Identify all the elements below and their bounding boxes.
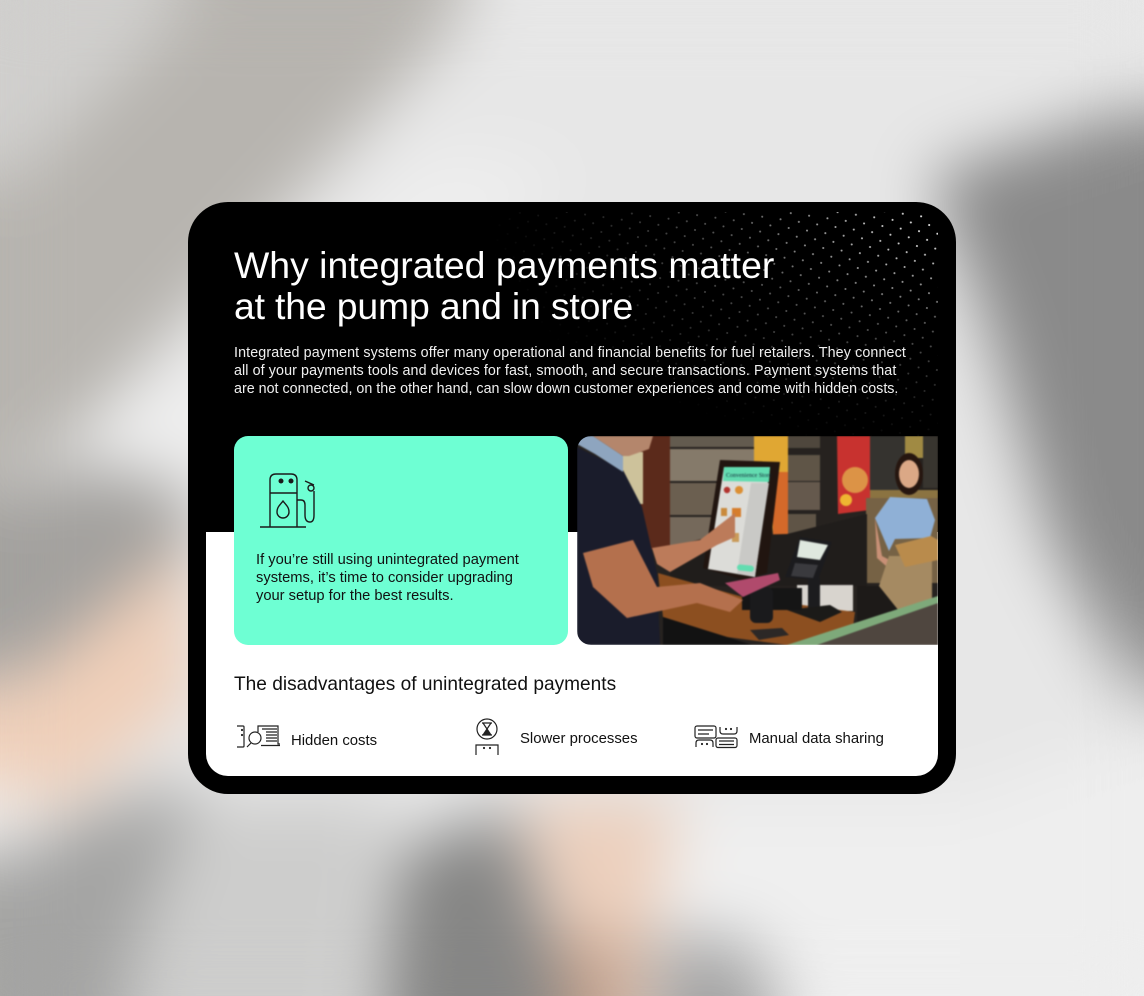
- title: Why integrated payments matter: [234, 244, 774, 286]
- intro text: Integrated payment systems offer many operational and financial benefits for fuel retailers. They connect: [234, 345, 906, 361]
- icon: hourglass and person: [475, 718, 499, 755]
- icon: chat bubbles: [694, 725, 738, 748]
- item: manual data sharing: [694, 725, 884, 748]
- item: hidden costs: [237, 725, 377, 749]
- counter: [658, 573, 855, 645]
- menu boards: [870, 436, 905, 491]
- section heading: The disadvantages of unintegrated payments: [234, 674, 616, 695]
- label: Slower processes: [520, 731, 638, 747]
- intro text: [234, 345, 906, 397]
- payment terminal: [808, 578, 820, 608]
- card: [188, 202, 956, 794]
- wood post: [641, 436, 670, 549]
- sepia wall panels: [670, 436, 755, 447]
- icon: magnifier over document: [237, 725, 280, 748]
- cashier: [895, 453, 923, 495]
- customer shirt: [577, 447, 660, 645]
- title: at the pump and in store: [234, 285, 633, 327]
- intro text: are not connected, on the other hand, can slow down customer experiences and come with hidden costs.: [234, 381, 898, 397]
- panel: mint callout: [234, 436, 568, 645]
- item: slower processes: [475, 718, 638, 755]
- white lower panel: [206, 532, 938, 776]
- yellow poster: [754, 436, 788, 535]
- customer neck: [593, 436, 653, 456]
- callout text: If you’re still using unintegrated payment: [256, 552, 519, 568]
- kiosk: [703, 460, 780, 580]
- scanner: [742, 588, 802, 610]
- callout text: [256, 552, 519, 604]
- kiosk screen title: Convenience Store: [726, 473, 772, 479]
- upper arm: [652, 513, 735, 572]
- label: Manual data sharing: [749, 731, 884, 747]
- callout text: systems, it’s time to consider upgrading: [256, 570, 513, 586]
- lower arm: [583, 540, 743, 618]
- dark lower wall: [670, 514, 867, 586]
- icon: fuel pump: [260, 473, 315, 528]
- photo: customer at self-checkout kiosk: [577, 436, 938, 645]
- glass display case: [787, 597, 938, 645]
- bottle: [725, 573, 780, 597]
- red poster: [837, 436, 870, 514]
- customer collar: [577, 436, 623, 472]
- title: [234, 244, 774, 327]
- label: Hidden costs: [291, 733, 377, 749]
- callout text: your setup for the best results.: [256, 588, 454, 604]
- intro text: all of your payments tools and devices for fast, smooth, and secure transactions. Payment systems that: [234, 363, 896, 379]
- halftone dot pattern: [515, 212, 938, 436]
